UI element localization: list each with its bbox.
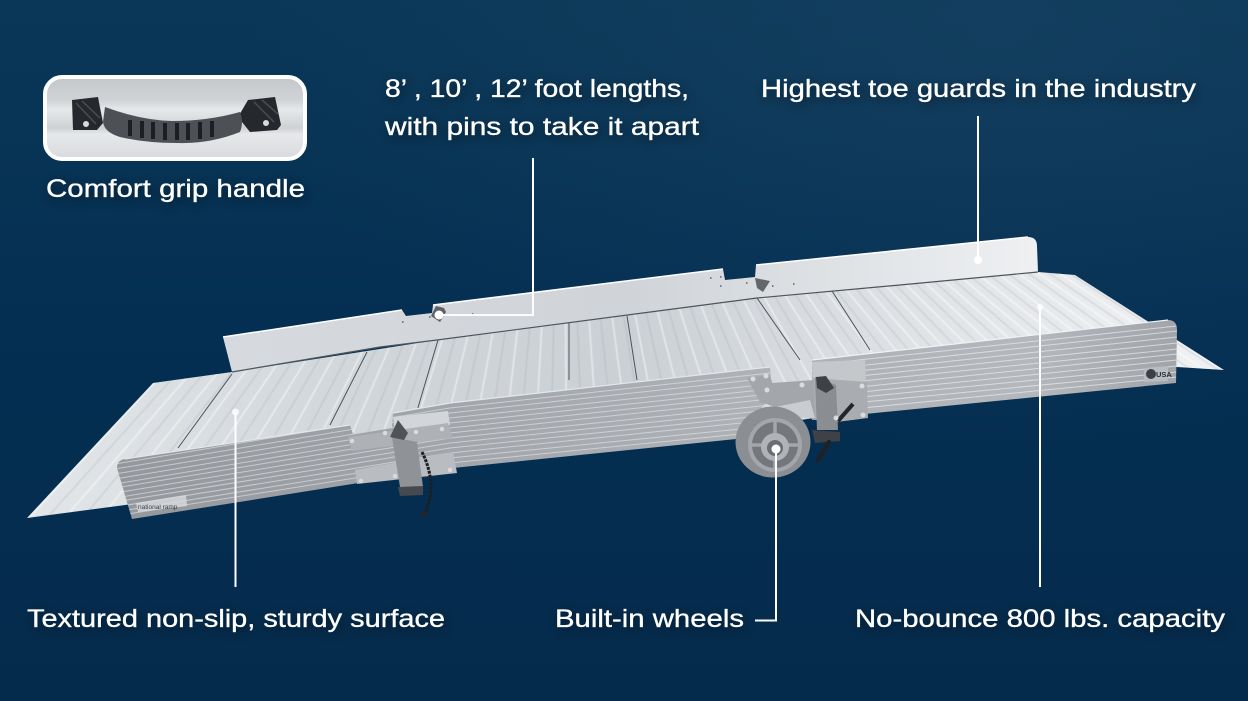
wheel [736, 406, 810, 478]
feature: non-slip surface [27, 408, 445, 633]
feature: lengths [384, 75, 699, 320]
ramp deck surface [27, 272, 1224, 518]
handle photo inset [45, 77, 305, 159]
label: lengths and pins: with pins to take it apart [384, 113, 699, 141]
left hinge [348, 411, 457, 517]
deck seams [178, 291, 870, 448]
label: lengths and pins: 8’ , 10’ , 12’ foot lengths, [385, 75, 689, 103]
USA badge [1144, 366, 1172, 382]
feature: toe guards [761, 75, 1197, 264]
ramp illustration [27, 236, 1224, 519]
near side wall: left and centre sections [115, 367, 772, 519]
left manufacturer label: national ramp [138, 504, 178, 511]
near side wall: right section [812, 320, 1177, 420]
feature: capacity [855, 304, 1226, 633]
feature: wheels [555, 444, 780, 633]
label: wheels: Built-in wheels [555, 605, 744, 633]
leader: capacity [1037, 304, 1043, 587]
leader: wheels [755, 444, 780, 620]
leader: toe guards [974, 116, 982, 264]
label: capacity: No-bounce 800 lbs. capacity [855, 605, 1226, 633]
leader: pins [434, 158, 533, 320]
feature: comfort grip handle [45, 77, 305, 203]
left manufacturer label [136, 495, 187, 512]
leader: surface [232, 408, 239, 587]
handle grip [103, 107, 242, 143]
handle brackets [72, 97, 103, 130]
far toe guard [223, 237, 1038, 372]
label: comfort grip handle: Comfort grip handle [46, 175, 305, 203]
label: toe guards: Highest toe guards in the industry [761, 75, 1197, 103]
right hinge [747, 360, 868, 460]
label: lengths and pins [384, 75, 699, 141]
label: surface: Textured non-slip, sturdy surface [27, 605, 445, 633]
USA badge: USA [1156, 370, 1172, 379]
